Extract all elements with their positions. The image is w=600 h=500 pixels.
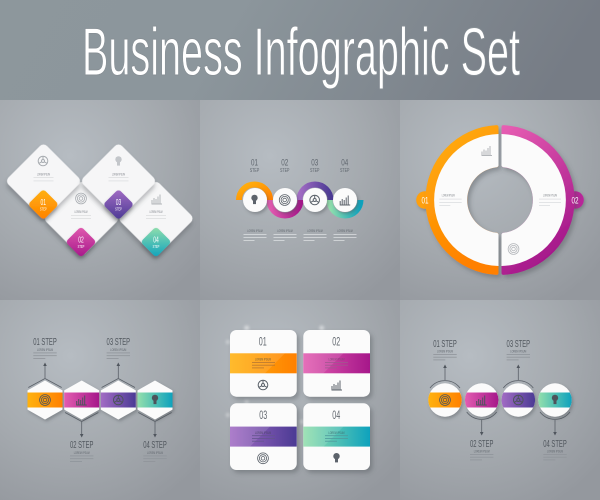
step labels: LOREM IPSUM	[147, 451, 163, 455]
left white segment	[434, 134, 499, 266]
diamond card 2: 02	[78, 236, 84, 244]
captions: LOREM IPSUM	[307, 229, 323, 233]
circle connectors	[430, 367, 570, 433]
card 01	[230, 330, 297, 397]
step labels: LOREM IPSUM	[37, 348, 53, 352]
icon: target	[508, 244, 519, 254]
step labels	[33, 337, 167, 455]
circle 2	[465, 383, 498, 417]
badge number 02: 02	[572, 196, 578, 206]
badge number 01: 01	[422, 196, 428, 206]
right caption	[539, 194, 561, 206]
badge 01 circle	[416, 191, 434, 209]
left caption: LOREM IPSUM	[442, 194, 455, 198]
step labels: LOREM IPSUM	[474, 449, 490, 453]
icon: bars	[482, 146, 492, 156]
icon circles	[243, 188, 357, 212]
panel: hexagons	[0, 300, 200, 500]
light flares	[226, 326, 324, 423]
step labels: LOREM IPSUM	[110, 348, 126, 352]
step labels: STEP	[310, 168, 320, 174]
diamond card 1: LOREM IPSUM	[37, 172, 50, 176]
left half ring	[425, 125, 499, 275]
diamond card 1	[5, 142, 82, 220]
step labels: 01 STEP	[33, 337, 57, 348]
card 03: 03	[259, 408, 267, 422]
step labels: 03 STEP	[107, 337, 130, 348]
diamond card 3: LOREM IPSUM	[112, 172, 125, 176]
step labels: 01	[251, 158, 258, 168]
step labels: 04	[341, 158, 348, 168]
panel: cards	[200, 300, 400, 500]
step labels: LOREM IPSUM	[437, 349, 453, 353]
panel: diamonds	[0, 100, 200, 300]
diamond card 3: STEP	[115, 206, 122, 212]
step labels: STEP	[280, 168, 290, 174]
captions	[244, 229, 356, 241]
step labels: LOREM IPSUM	[510, 349, 526, 353]
hexagon 3	[101, 381, 136, 419]
diamond card 2: STEP	[78, 244, 84, 249]
card 04: 04	[332, 408, 340, 422]
step labels	[433, 339, 567, 453]
diamond card 4	[117, 180, 195, 258]
diamond card 1: 01	[41, 198, 46, 207]
right caption: LOREM IPSUM	[543, 194, 557, 198]
hexagon 1	[28, 381, 62, 419]
card 02	[303, 330, 370, 397]
diamond card 1: STEP	[40, 206, 47, 212]
card 04: LOREM IPSUM	[328, 431, 344, 435]
wave arcs	[239, 184, 360, 215]
right white segment	[501, 134, 566, 266]
step labels: 03	[311, 158, 318, 168]
left caption	[439, 194, 462, 206]
step labels: LOREM IPSUM	[74, 451, 90, 455]
arrow heads	[43, 362, 157, 438]
captions: LOREM IPSUM	[337, 229, 353, 233]
arrow heads	[443, 364, 557, 436]
diamond card 2	[43, 180, 120, 258]
circle 3	[502, 383, 535, 417]
circle 4	[538, 383, 572, 417]
panel: circles	[400, 300, 600, 500]
circle 1	[428, 383, 462, 417]
diamond card 3: 03	[116, 198, 122, 207]
card 02: 02	[332, 334, 340, 348]
right half ring	[501, 125, 575, 275]
badge 02 circle	[566, 191, 584, 209]
title band	[0, 0, 600, 100]
diamond card 3	[80, 142, 157, 220]
card 01: 01	[259, 334, 267, 348]
card 03	[230, 403, 297, 470]
diamond card 4: 04	[153, 236, 159, 244]
panel: donut	[400, 100, 600, 300]
caption lines	[433, 354, 567, 460]
card 02: LOREM IPSUM	[328, 358, 344, 362]
diamond card 2: LOREM IPSUM	[74, 210, 88, 214]
step labels: LOREM IPSUM	[547, 449, 563, 453]
step labels: 04 STEP	[143, 440, 167, 451]
step labels: 02	[281, 158, 288, 168]
step labels: 04 STEP	[543, 439, 567, 450]
step labels: 02 STEP	[470, 439, 494, 450]
step labels	[250, 158, 350, 174]
step labels: 03 STEP	[507, 339, 530, 350]
captions: LOREM IPSUM	[247, 229, 263, 233]
diamond card 4: STEP	[153, 244, 159, 249]
step labels: 01 STEP	[433, 339, 457, 350]
hexagon 4	[138, 381, 172, 419]
step labels: 02 STEP	[70, 440, 94, 451]
hexagon 2	[64, 381, 99, 419]
step labels: STEP	[340, 168, 350, 174]
step labels: STEP	[250, 168, 259, 174]
card 04	[303, 403, 370, 470]
caption lines	[33, 352, 167, 462]
hexagon connectors	[28, 366, 172, 434]
diamond card 4: LOREM IPSUM	[150, 210, 162, 214]
card 03: LOREM IPSUM	[255, 431, 271, 435]
captions: LOREM IPSUM	[277, 229, 293, 233]
panel: wave timeline	[200, 100, 400, 300]
card 01: LOREM IPSUM	[255, 358, 271, 362]
